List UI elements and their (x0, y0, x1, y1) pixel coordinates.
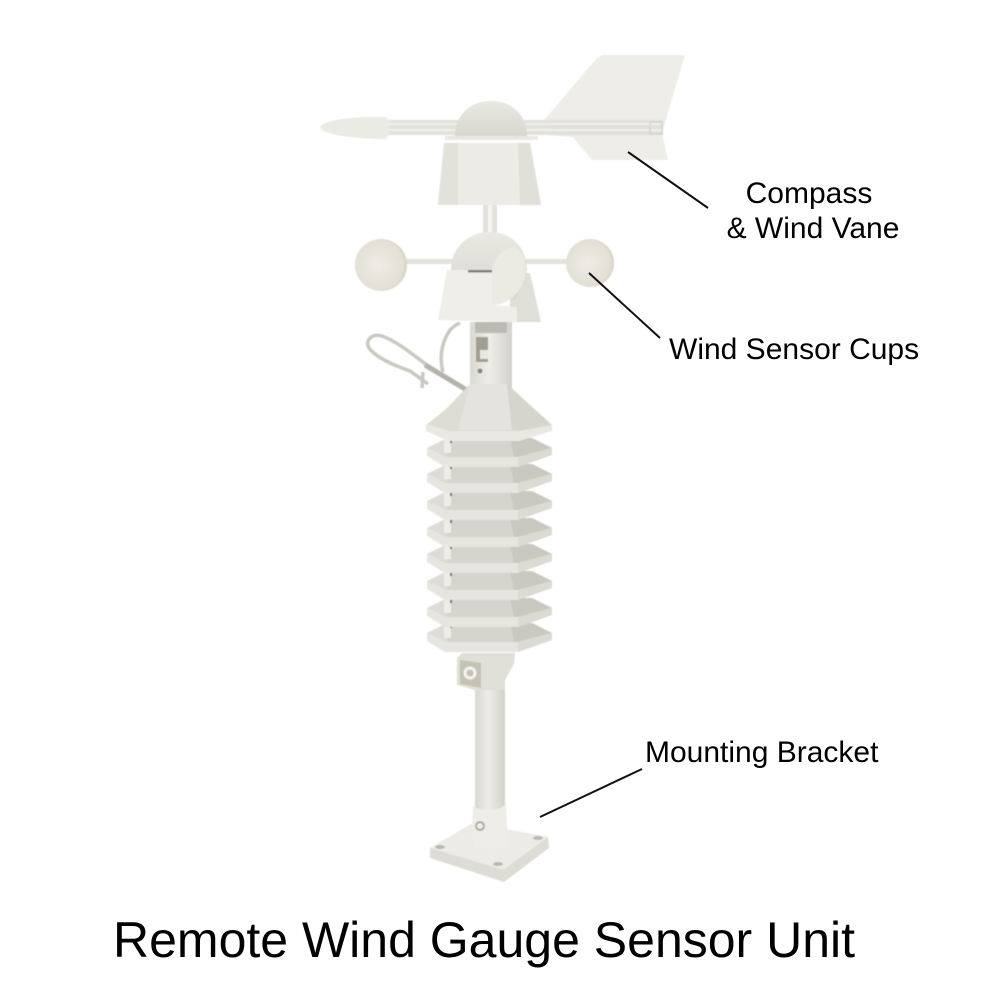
vane nose (320, 117, 389, 139)
weather sensor unit (320, 55, 685, 882)
wind cups assembly (355, 232, 614, 322)
rear housing (510, 273, 541, 322)
base collar (472, 804, 508, 849)
leader line: cups (589, 273, 660, 338)
left cup (355, 239, 407, 291)
label: wind sensor cups: Wind Sensor Cups (669, 333, 919, 366)
hub dome (451, 232, 527, 300)
vane flange (445, 136, 538, 140)
roof rim (426, 424, 552, 441)
label: wind vane: & Wind Vane (727, 212, 899, 245)
shaft (483, 205, 497, 235)
vane tail fin (545, 55, 685, 160)
cable block (457, 653, 515, 690)
fins (427, 623, 552, 652)
cable (368, 323, 463, 388)
leader line: vane (628, 152, 708, 208)
vane dome (455, 101, 527, 136)
label: compass and wind vane: Compass (746, 177, 872, 210)
front cup (492, 247, 525, 305)
right cup (566, 239, 614, 287)
leader line: bracket (540, 769, 642, 817)
mounting base (430, 804, 549, 882)
compass housing (438, 143, 541, 205)
cup arms (400, 259, 575, 264)
base screw holes (435, 845, 445, 849)
title: Remote Wind Gauge Sensor Unit (113, 912, 855, 968)
block ring (465, 668, 475, 678)
base plate (430, 823, 549, 882)
front housing (438, 270, 517, 322)
stem window (476, 337, 488, 362)
shield roof (426, 384, 552, 440)
mounting pole (475, 683, 505, 811)
radiation shield (426, 384, 552, 652)
sensor stem (470, 322, 512, 388)
label: mounting bracket: Mounting Bracket (645, 736, 879, 769)
wind vane assembly (320, 55, 685, 205)
vane rod (385, 120, 663, 135)
